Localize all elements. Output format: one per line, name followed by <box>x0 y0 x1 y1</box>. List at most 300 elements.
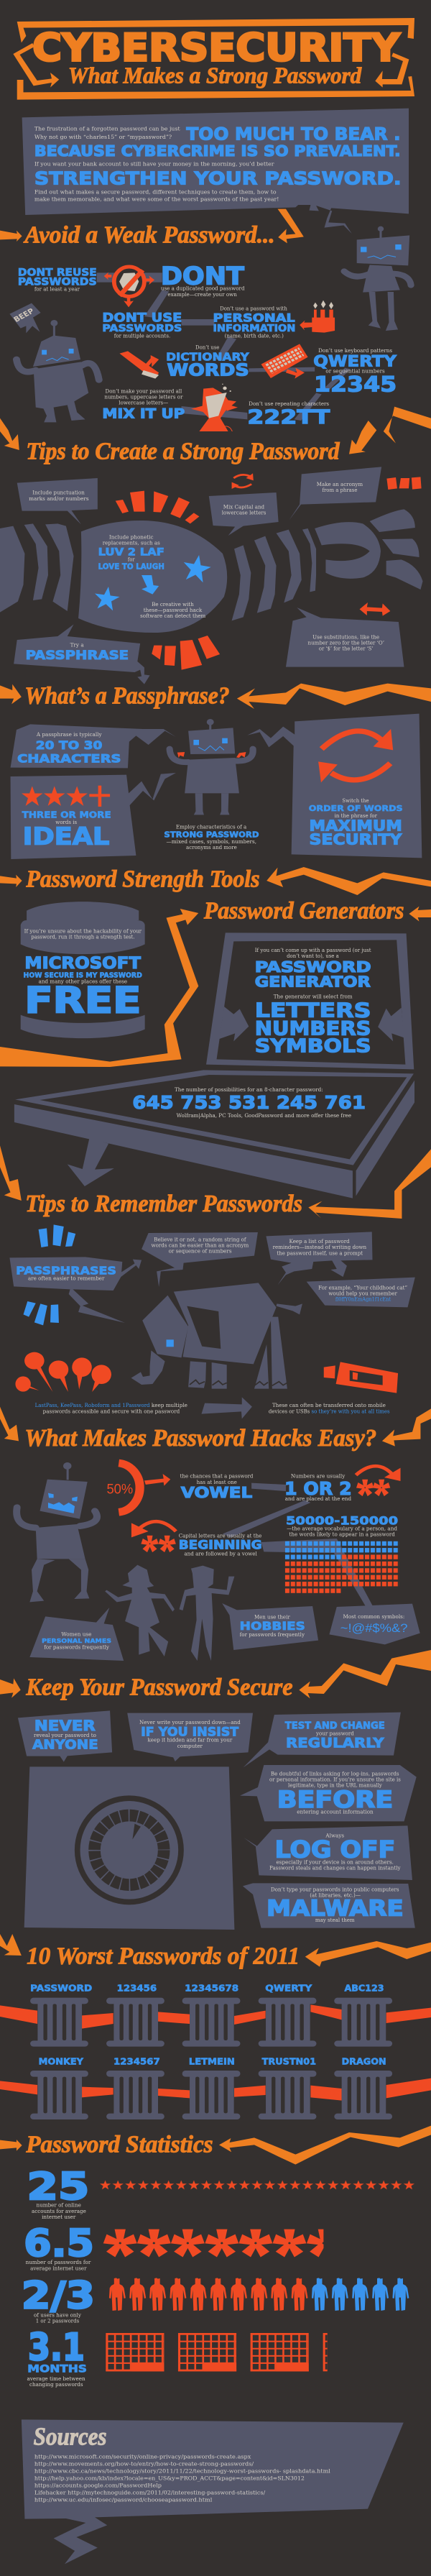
callout: random words <box>142 1232 258 1287</box>
callout: acronym: from a phrase <box>322 487 358 493</box>
heading: Avoid a Weak Password... <box>24 221 275 248</box>
text: strong password characteristics: Employ characteristics of a <box>176 824 247 830</box>
sources list: http://www.microsoft.com/security/online-privacy/passwords-create.aspx <box>34 2454 251 2460</box>
callout: mix case <box>209 492 279 536</box>
text: possibilities on keyboard: The number of possibilities for an 8-character password: <box>175 1086 323 1093</box>
callout: random words: words can be easier than an acronym <box>151 1242 249 1249</box>
pillars row 2 <box>30 2071 392 2119</box>
sources list: http://www.cbc.ca/news/technology/story/2011/11/22/technology-worst-passwords- splashdata.html <box>34 2468 330 2475</box>
intro text: STRENGTHEN YOUR PASSWORD. <box>34 168 402 189</box>
heading: What Makes Password Hacks Easy? <box>24 1424 376 1451</box>
callout: passphrase: PASSPHRASE <box>26 648 129 663</box>
sources list: https://accounts.google.com/PasswordHelp <box>34 2483 162 2489</box>
stat: capitals at beginning: Capital letters are usually at the <box>179 1533 262 1539</box>
list: weak password rules: DICTIONARY <box>166 350 249 363</box>
callout: passphrases: are often easier to remember <box>28 1275 105 1282</box>
calendars <box>106 2333 328 2371</box>
list: weak password rules: use a duplicated good password <box>161 285 245 292</box>
stat: 2/3 of users <box>22 2275 409 2324</box>
stat: 50 percent vowel: VOWEL <box>181 1485 253 1502</box>
icon: birthday cake <box>300 301 335 333</box>
section: 10 worst passwords <box>0 1934 431 2165</box>
arrow: heading left <box>0 875 22 887</box>
panel: phonetic replacements: Be creative with <box>152 601 194 608</box>
stat: vocabulary grid: —the average vocabulary of a person, and <box>287 1526 397 1532</box>
heading: 10 Worst Passwords of 2011 <box>27 1943 300 1969</box>
icon: balloons <box>15 1352 111 1392</box>
callout: women use personal names: Women use <box>61 1631 92 1637</box>
stat: 6.5 passwords <box>25 2227 323 2271</box>
section: tips to create a strong password <box>0 438 423 684</box>
callout: 20 to 30 characters: CHARACTERS <box>17 752 121 766</box>
callout: punctuation <box>17 478 98 524</box>
stat: numbers at the end: 1 OR 2 <box>284 1479 352 1500</box>
robot: left with beep bubble <box>9 303 99 422</box>
callout: never reveal: reveal your password to <box>34 1732 96 1738</box>
sources list: Lifehacker http://mytechnoguide.com/2011/02/interesting-password-statistics/ <box>34 2490 266 2496</box>
callout: 20 to 30 characters: 20 TO 30 <box>36 739 102 753</box>
callout: women use personal names: for passwords frequently <box>44 1644 109 1651</box>
callout: substitutions: or ‘$’ for the letter ‘S’ <box>319 646 374 652</box>
intro text: The frustration of a forgotten password can be just <box>34 126 180 132</box>
panel: sources <box>22 2419 404 2564</box>
callout: passphrases <box>9 1257 142 1323</box>
list: weak password rules <box>18 262 397 428</box>
text: password managers: keep multiple <box>152 1402 187 1408</box>
callout: men use hobbies <box>222 1603 318 1650</box>
screen text <box>255 947 371 1057</box>
icon: book <box>119 351 159 379</box>
list: weak password rules: PERSONAL <box>213 311 295 324</box>
callout: punctuation: Include punctuation <box>32 490 85 496</box>
icon: usb stick <box>324 1362 398 1393</box>
callout: women use personal names <box>29 1608 124 1661</box>
title banner <box>13 18 414 100</box>
callout: mix case: lowercase letters <box>222 510 266 516</box>
stat: vocabulary grid: the words likely to appear in a password <box>289 1531 395 1538</box>
panel: phonetic replacements: software can detect them <box>140 613 206 619</box>
icon: red fan top <box>116 491 199 523</box>
list: weak password rules: Don’t use a password with <box>220 306 287 312</box>
text: mobile transfer: so they’re with you at all times <box>312 1408 390 1414</box>
stat: numbers at the end: Numbers are usually <box>291 1473 346 1479</box>
text: strong password characteristics: acronyms and more <box>186 844 237 851</box>
worst password labels <box>30 1984 386 2067</box>
arrow: heading right <box>382 1408 431 1447</box>
list: weak password rules: for at least a year <box>34 286 80 293</box>
arrow: heading left <box>0 684 22 704</box>
connector path <box>97 272 351 421</box>
stat: numbers at the end <box>284 1466 401 1502</box>
worst password labels: MONKEY <box>39 2057 84 2067</box>
icon: keyboard <box>261 344 308 379</box>
text: possibilities on keyboard <box>132 1086 366 1119</box>
icon: red ticks <box>386 477 422 490</box>
callout: malware: (at libraries, etc.)— <box>310 1892 361 1899</box>
sources heading: Sources <box>34 2423 106 2451</box>
jar: strength test: MICROSOFT <box>24 954 142 973</box>
callout: three or more words <box>11 773 176 859</box>
icon: no recycling <box>104 267 154 307</box>
callout: switch word order: MAXIMUM <box>309 818 402 835</box>
icon: blender <box>191 384 238 431</box>
arrow: orange zigzag to generators <box>0 909 198 1067</box>
list: weak password rules: DONT <box>161 262 244 290</box>
heading: What’s a Passphrase? <box>24 682 230 709</box>
stat: vocabulary grid: 50000-150000 <box>286 1513 398 1527</box>
screen text: If you can’t come up with a password (or just <box>255 947 371 953</box>
callout: before: BEFORE <box>277 1787 393 1813</box>
callout: men use hobbies: for passwords frequently <box>240 1631 305 1638</box>
stat: capitals at beginning: and are followed by a vowel <box>184 1551 257 1557</box>
connector: hack facts <box>223 1483 374 1608</box>
screen text: PASSWORD <box>255 958 371 976</box>
text: password managers <box>35 1402 187 1414</box>
list: weak password rules: for multiple accounts. <box>114 333 170 339</box>
list: weak password rules: example—create your own <box>167 291 237 298</box>
callout: before <box>240 1765 417 1821</box>
arrow: heading right <box>267 867 431 895</box>
illustration: elephant <box>131 1283 302 1389</box>
callout: reminders: reminders—instead of writing down <box>273 1244 366 1250</box>
worst password labels: ABC123 <box>344 1984 384 1994</box>
callout: men use hobbies: Men use their <box>254 1614 290 1620</box>
list: weak password rules: numbers, uppercase letters or <box>104 394 183 400</box>
panel: intro <box>22 109 409 234</box>
list: weak password rules: INFORMATION <box>213 324 295 334</box>
list: weak password rules: (name, birth date, etc.) <box>225 333 284 339</box>
callout: before: entering account information <box>297 1809 374 1815</box>
worst password labels: 12345678 <box>185 1984 238 1994</box>
sources list: http://help.yahoo.com/kb/index?locale=en_US&y=PROD_ACCT&page=content&id=SLN3012 <box>34 2475 305 2482</box>
callout: if you insist: IF YOU INSIST <box>141 1725 239 1739</box>
callout: mix case: Mix Capital and <box>223 504 264 510</box>
jar: strength test: FREE <box>24 979 141 1022</box>
panel: phonetic replacements: Include phonetic <box>109 534 154 541</box>
callout: reminders: Keep a list of password <box>289 1238 350 1245</box>
list: weak password rules: DONT USE <box>102 311 182 325</box>
text: mobile transfer <box>269 1402 390 1414</box>
screen text: LETTERS <box>255 999 371 1022</box>
stat: 3.1 months: changing passwords <box>29 2381 83 2388</box>
sources list: http://www.movements.org/how-to/entry/how-to-create-strong-passwords/ <box>34 2461 254 2467</box>
subtitle: What Makes a Strong Password <box>68 64 362 88</box>
jar: strength test <box>21 902 145 1038</box>
stat: 6.5 passwords: number of passwords for <box>26 2259 91 2265</box>
callout: common symbols: ~!@#$%&? <box>340 1621 407 1635</box>
dial needle <box>132 1824 141 1839</box>
stat: capitals at beginning <box>131 1521 262 1557</box>
callout: never reveal: NEVER <box>34 1718 96 1734</box>
callout: malware: may steal them <box>315 1917 355 1923</box>
panel: phonetic replacements: LUV 2 LAF <box>98 546 164 558</box>
callout: log off: Password steals and changes can happen instantly <box>269 1865 401 1871</box>
callout: switch word order: in the phrase for <box>335 812 377 819</box>
section: tips to remember passwords <box>0 1086 431 1323</box>
stat: 25 accounts: internet user <box>42 2214 75 2220</box>
dial <box>75 1795 184 1905</box>
heading: Tips to Remember Passwords <box>25 1190 302 1216</box>
worst password labels: 123456 <box>117 1984 157 1994</box>
callout: if you insist: keep it hidden and far from your <box>147 1737 233 1743</box>
callout: before: legitimate, type in the URL manually <box>288 1782 382 1788</box>
arrows: orange to next section <box>0 407 431 454</box>
stat: 50 percent vowel: has at least one <box>197 1479 237 1485</box>
panel: phonetic replacements: these—password hack <box>144 607 202 613</box>
arrow: statistics right <box>219 2126 431 2165</box>
callout: switch word order: Switch the <box>342 797 369 804</box>
heading: strength tools: Password Strength Tools <box>25 866 260 892</box>
panel: phonetic replacements <box>78 521 227 633</box>
jar: strength test: password, run it through a strength test. <box>31 934 135 940</box>
section: header and intro <box>13 18 414 234</box>
callout: malware: MALWARE <box>267 1896 404 1921</box>
arrow: heading right <box>299 1650 431 1698</box>
callout: childhood cat: would help you remember <box>328 1291 397 1297</box>
screen text: NUMBERS <box>255 1017 371 1040</box>
callout: men use hobbies: HOBBIES <box>240 1619 305 1633</box>
arrow: heading left <box>0 231 22 242</box>
worst password labels: DRAGON <box>342 2057 386 2067</box>
text: strong password characteristics <box>164 824 259 851</box>
illustration: man <box>179 1566 234 1661</box>
text: password managers: passwords accessible and secure with one password <box>43 1408 180 1414</box>
worst password labels: TRUSTN01 <box>262 2057 316 2067</box>
section: strength tools and generators <box>0 866 431 1198</box>
people row <box>109 2278 308 2311</box>
list: weak password rules: PASSWORDS <box>102 324 182 334</box>
pillars row 1 <box>30 1998 392 2047</box>
intro text: BECAUSE CYBERCRIME IS SO PREVALENT. <box>34 143 401 160</box>
intro text <box>34 124 402 203</box>
worst password labels: PASSWORD <box>30 1984 92 1994</box>
worst password labels: LETMEIN <box>189 2057 235 2067</box>
callout: three or more words: THREE OR MORE <box>22 810 111 820</box>
robot: evil <box>17 1462 97 1602</box>
arrow: heading left <box>0 1934 22 1956</box>
callout: three or more words: IDEAL <box>23 823 109 851</box>
banner frame <box>13 18 414 100</box>
illustration: wrist and fist <box>0 509 423 620</box>
arrow: heading left <box>0 1407 19 1441</box>
stat: 50 percent vowel: 50% <box>106 1482 133 1497</box>
sources list: http://www.uc.edu/infosec/password/chooseapassword.html <box>34 2497 213 2503</box>
arrows in screen <box>219 1007 404 1041</box>
jar: strength test: and many other places offer these <box>39 978 127 984</box>
callout: malware: Don’t type your passwords into public computers <box>271 1887 399 1892</box>
arrow: statistics left <box>0 2140 22 2151</box>
robot: top right <box>344 226 411 331</box>
section: password statistics <box>22 2165 415 2388</box>
arrow: heading right <box>305 1941 431 1967</box>
callout: test and change <box>244 1713 401 1767</box>
callout: substitutions: number zero for the letter ‘O’ <box>308 640 384 646</box>
list: weak password rules: PASSWORDS <box>18 276 97 288</box>
callout: reminders: the password itself, use a prompt <box>277 1250 363 1256</box>
stat: 25 accounts <box>27 2165 415 2220</box>
stat: 6.5 passwords: average internet user <box>30 2265 87 2271</box>
callout: random words: or sequence of numbers <box>169 1248 232 1255</box>
text: strong password characteristics: —mixed cases, symbols, numbers, <box>167 838 256 845</box>
worst password labels: 1234567 <box>113 2057 160 2067</box>
stat: 3.1 months <box>27 2327 328 2388</box>
list: weak password rules: lowercase letters— <box>119 400 168 406</box>
illustration: woman <box>105 1565 175 1656</box>
callout: random words: Believe it or not, a random string of <box>154 1237 246 1243</box>
panel: phonetic replacements: LOVE TO LAUGH <box>98 562 164 571</box>
section: what's a passphrase <box>0 682 431 859</box>
list: weak password rules: MIX IT UP <box>102 405 185 421</box>
list: weak password rules: Don’t use <box>195 344 220 350</box>
arrow: heading left <box>0 1678 21 1698</box>
intro text: Find out what makes a secure password, different techniques to create them, how to <box>34 189 277 195</box>
screen text: SYMBOLS <box>255 1035 371 1057</box>
screen text: The generator will select from <box>274 994 353 999</box>
keyboard base <box>14 1070 414 1198</box>
stat: 3.1 months: MONTHS <box>27 2362 87 2375</box>
laptop: password generator <box>14 932 414 1198</box>
heading: Keep Your Password Secure <box>25 1674 293 1700</box>
text: password managers: LastPass, KeePass, Roboform and 1Password <box>35 1402 150 1408</box>
callout: test and change: your password <box>315 1731 354 1736</box>
callout: if you insist <box>127 1713 253 1761</box>
callout: childhood cat: For example, “Your childhood cat” <box>318 1285 407 1291</box>
callout: log off: LOG OFF <box>275 1837 395 1864</box>
heading: Tips to Create a Strong Password <box>26 438 340 464</box>
callout: switch word order <box>247 714 422 858</box>
stat: 3.1 months: average time between <box>27 2375 85 2382</box>
callout: passphrases: PASSPHRASES <box>16 1264 116 1277</box>
callout: childhood cat: fl0ffY0nEmAgn1f1cEnt <box>335 1296 391 1302</box>
speech bubble: beep <box>9 303 41 333</box>
callout: women use personal names: PERSONAL NAMES <box>42 1638 111 1645</box>
arrow: heading right <box>308 1149 431 1219</box>
callout: 20 to 30 characters <box>11 724 176 768</box>
section: avoid a weak password <box>0 209 431 454</box>
screen text: don’t want to), use a <box>287 953 339 959</box>
callout: before: Be doubtful of links asking for log-ins, passwords <box>271 1771 399 1777</box>
callout: punctuation: marks and/or numbers <box>29 495 89 502</box>
stat: vocabulary grid <box>285 1513 399 1595</box>
callout: substitutions <box>286 608 404 667</box>
title text: CYBERSECURITY <box>32 26 401 70</box>
callout: switch word order: SECURITY <box>309 832 402 848</box>
callout: common symbols: Most common symbols: <box>343 1613 404 1620</box>
speech bubble: beep: BEEP <box>12 306 36 324</box>
text: possibilities on keyboard: 645 753 531 245 761 <box>132 1093 366 1114</box>
list: weak password rules: 222TT <box>247 405 330 428</box>
arrow: grey right <box>201 1397 252 1418</box>
list: weak password rules: QWERTY <box>313 353 397 370</box>
callout: three or more words: words is <box>55 819 77 825</box>
list: weak password rules: Don’t use repeating characters <box>249 400 329 407</box>
sources list <box>34 2454 330 2503</box>
callout: log off: especially if your device is on around others. <box>277 1859 394 1866</box>
star row <box>99 2180 415 2191</box>
intro text: Why not go with “charles15” or “mypassword”? <box>34 134 172 140</box>
list: weak password rules: Don’t use keyboard patterns <box>318 347 392 354</box>
callout: if you insist: computer <box>177 1743 203 1749</box>
section: password managers and hacks <box>0 1283 431 1661</box>
callout: switch word order: ORDER OF WORDS <box>309 804 403 813</box>
icon: double arrow <box>360 602 390 616</box>
callout: 20 to 30 characters: A passphrase is typically <box>36 731 102 738</box>
icon: swap arrows <box>232 473 254 489</box>
stat: 2/3 of users: 1 or 2 passwords <box>36 2318 79 2324</box>
arrow: heading right <box>237 684 431 709</box>
stat: numbers at the end: and are placed at the end <box>285 1495 351 1502</box>
text: mobile transfer: devices or USBs <box>269 1408 310 1414</box>
callout: test and change: REGULARLY <box>286 1735 384 1751</box>
intro text: If you want your bank account to still have your money in the morning, you’d better <box>34 161 274 167</box>
jar: strength test: HOW SECURE IS MY PASSWORD <box>24 972 142 979</box>
text: mobile transfer: These can often be transferred onto mobile <box>272 1402 386 1408</box>
intro text: make them memorable, and what were some of the worst passwords of the past year! <box>34 196 279 203</box>
section: keep your password secure <box>0 1650 431 1767</box>
arrow: heading right <box>277 209 304 243</box>
section: safe and advice panels <box>24 1765 417 1930</box>
heading: password statistics: Password Statistics <box>25 2131 213 2158</box>
red connecting bars <box>0 2004 431 2101</box>
arrow: generators right <box>409 907 431 922</box>
icon: blue ticks bottom <box>24 1301 59 1325</box>
stat: 2/3 of users: of users have only <box>34 2312 81 2318</box>
intro text: TOO MUCH TO BEAR . <box>186 124 401 145</box>
icon: blue ticks top <box>39 1224 75 1247</box>
stat: 6.5 passwords: 6.5 <box>24 2222 94 2265</box>
worst password labels: QWERTY <box>265 1984 312 1994</box>
callout: acronym <box>289 467 381 520</box>
stat: 3.1 months: 3.1 <box>28 2327 85 2369</box>
callout: never reveal: ANYONE <box>32 1738 98 1752</box>
illustration: safe <box>24 1766 234 1930</box>
stat: 2/3 of users: 2/3 <box>22 2275 95 2318</box>
callout: log off <box>244 1825 412 1880</box>
section: sources <box>22 2419 404 2564</box>
jar: strength test: If you’re unsure about the hackability of your <box>24 928 142 934</box>
callout: before: or personal information. If you’re unsure the site is <box>269 1777 401 1782</box>
stat: 25 accounts: number of online <box>37 2202 81 2209</box>
list: weak password rules: DONT REUSE <box>18 266 97 278</box>
callout: never reveal <box>18 1710 112 1762</box>
screen text: GENERATOR <box>255 974 371 991</box>
callout: childhood cat <box>307 1278 415 1307</box>
robot: centre <box>170 719 253 815</box>
callout: acronym: Make an acronym <box>317 481 363 487</box>
icon: swap arrows large <box>318 729 393 782</box>
list: weak password rules: 12345 <box>314 373 397 397</box>
list: weak password rules: or sequential numbers <box>325 368 385 374</box>
text: strong password characteristics: STRONG PASSWORD <box>164 830 259 839</box>
stat: 50 percent vowel: the chances that a password <box>180 1473 253 1480</box>
stat: 25 accounts: accounts for average <box>32 2208 86 2214</box>
list: weak password rules: Don’t make your password all <box>106 388 182 394</box>
stat: 25 accounts: 25 <box>27 2165 89 2209</box>
screen frame <box>206 932 414 1069</box>
callout: log off: Always <box>325 1833 344 1839</box>
callout: reminders <box>266 1232 372 1285</box>
panel: phonetic replacements: replacements, such as <box>103 540 160 546</box>
panel: phonetic replacements: for <box>128 556 135 563</box>
icon: red burst bottom <box>152 636 220 670</box>
arrow: heading left <box>0 1145 22 1201</box>
callout: passphrase: Try a <box>70 642 84 648</box>
text: possibilities on keyboard: Wolfram|Alpha, PC Tools, GoodPassword and more offer these free <box>177 1112 351 1119</box>
callout: substitutions: Use substitutions, like the <box>312 634 379 641</box>
stat: 50 percent vowel <box>106 1463 253 1512</box>
callout: malware <box>243 1883 415 1928</box>
stat: capitals at beginning: BEGINNING <box>179 1539 262 1552</box>
